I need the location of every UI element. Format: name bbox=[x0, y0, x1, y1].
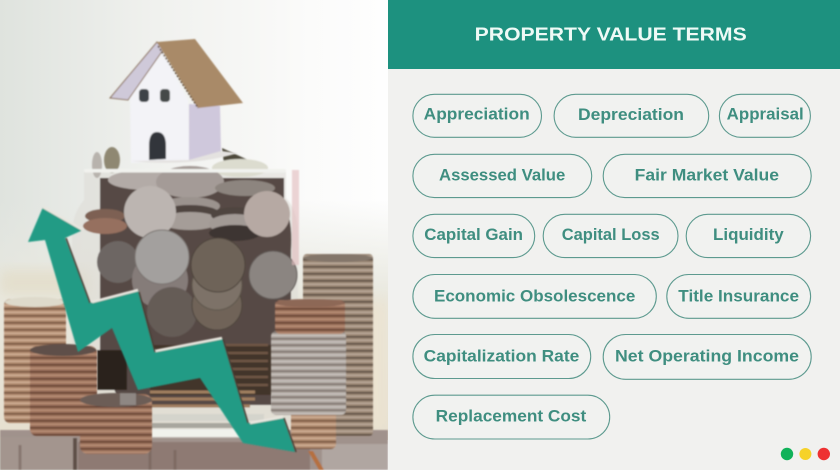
icon: green zig-zag arrow bbox=[28, 207, 296, 452]
traffic-light dots bbox=[781, 448, 830, 460]
term: Appraisal bbox=[719, 94, 810, 137]
right back stack bbox=[303, 254, 373, 436]
glass jar of coins bbox=[72, 147, 299, 438]
icon: paper house bbox=[110, 39, 243, 163]
term: Capitalization Rate bbox=[413, 334, 591, 378]
header bar bbox=[388, 0, 840, 69]
term: Fair Market Value bbox=[603, 154, 811, 198]
photo background bbox=[0, 0, 388, 470]
panel: photo of house on a jar of coins with green arrow bbox=[0, 0, 388, 470]
term: Assessed Value: Assessed Value bbox=[439, 166, 565, 184]
term: Fair Market Value: Fair Market Value bbox=[635, 166, 779, 184]
right front stack bbox=[271, 299, 346, 449]
left back stack bbox=[4, 297, 66, 423]
term: Capital Loss bbox=[543, 214, 678, 258]
term: Title Insurance: Title Insurance bbox=[678, 287, 799, 305]
term: Replacement Cost bbox=[413, 395, 610, 439]
term: Liquidity bbox=[686, 214, 811, 258]
term: Economic Obsolescence bbox=[413, 274, 656, 318]
term: Title Insurance bbox=[667, 274, 811, 318]
panel: terms background bbox=[388, 0, 840, 470]
term: Appraisal: Appraisal bbox=[727, 105, 804, 123]
term: Capital Gain: Capital Gain bbox=[424, 226, 523, 244]
term: Appreciation: Appreciation bbox=[424, 105, 530, 123]
term: Economic Obsolescence: Economic Obsolescence bbox=[434, 287, 635, 305]
coin stacks bbox=[4, 254, 373, 454]
term: Liquidity: Liquidity bbox=[713, 226, 785, 244]
term: Capitalization Rate: Capitalization Rate bbox=[424, 347, 579, 365]
title: PROPERTY VALUE TERMS bbox=[475, 24, 747, 45]
term: Net Operating Income: Net Operating Income bbox=[615, 347, 799, 365]
wooden table bbox=[0, 430, 388, 470]
term: Capital Gain bbox=[413, 214, 535, 258]
front stack bbox=[80, 393, 152, 454]
middle left stack bbox=[30, 344, 97, 436]
term: Capital Loss: Capital Loss bbox=[562, 226, 660, 244]
term: Depreciation: Depreciation bbox=[578, 106, 684, 124]
term: Depreciation bbox=[554, 94, 709, 137]
term: Replacement Cost: Replacement Cost bbox=[436, 407, 587, 425]
term: Net Operating Income bbox=[603, 334, 811, 379]
term: Assessed Value bbox=[413, 154, 592, 198]
term: Appreciation bbox=[413, 94, 542, 137]
